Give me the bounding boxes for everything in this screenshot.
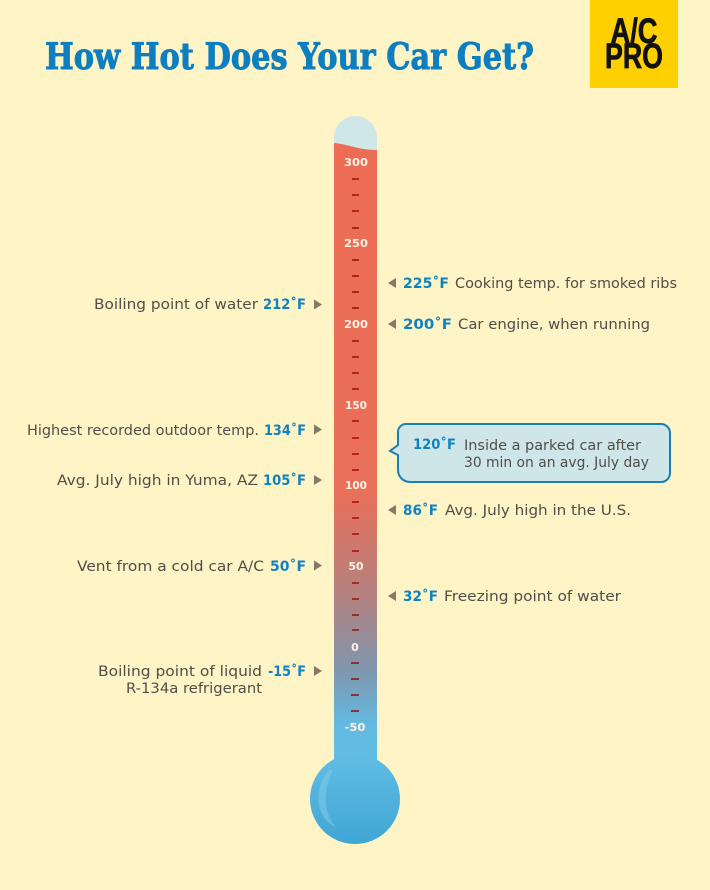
label: 225F smoked ribs: 225˚F (403, 275, 449, 292)
thermometer glass top (334, 116, 377, 152)
scale labels: 150 (345, 399, 367, 412)
callout: 120F parked car (390, 424, 670, 482)
label: 105F Yuma: 105˚F (263, 472, 306, 489)
label: 200F engine (388, 316, 650, 333)
scale labels: 50 (348, 560, 364, 573)
thermometer bulb (310, 754, 400, 844)
label: -15F refrigerant: Boiling point of liquid (98, 664, 262, 680)
scale labels: 100 (345, 479, 367, 492)
label: -15F refrigerant: -15˚F (268, 663, 306, 680)
label: 32F freezing: 32˚F (403, 588, 438, 605)
label: 32F freezing: Freezing point of water (444, 589, 621, 605)
label: 50F vent (77, 558, 322, 575)
label: 86F US high: 86˚F (403, 502, 438, 519)
label: 105F Yuma: Avg. July high in Yuma, AZ (57, 473, 258, 489)
label: 200F engine: Car engine, when running (458, 317, 650, 333)
scale labels: 0 (351, 641, 359, 654)
label: 32F freezing (388, 588, 621, 605)
logo: A/C Pro: A/C (610, 12, 658, 51)
scale ticks (351, 178, 359, 712)
label: 86F US high (388, 502, 631, 519)
label: -15F refrigerant: R-134a refrigerant (126, 681, 262, 697)
bulb highlight (318, 770, 336, 827)
label: 212F boiling point of water (94, 296, 322, 313)
thermometer tube (334, 143, 377, 770)
thermometer (310, 116, 400, 844)
callout: 120F parked car: Inside a parked car after (464, 438, 641, 454)
label: 105F Yuma (57, 472, 322, 489)
logo: A/C Pro: PRO (605, 37, 663, 76)
title: How Hot Does Your Car Get? (45, 36, 534, 78)
label: 212F boiling point of water: 212˚F (263, 296, 306, 313)
label: 134F highest recorded: Highest recorded outdoor temp. (27, 423, 259, 439)
label: 50F vent: 50˚F (270, 558, 306, 575)
callout: 120F parked car: 30 min on an avg. July day (464, 455, 649, 471)
label: -15F refrigerant (98, 663, 322, 697)
scale labels: 200 (344, 318, 368, 331)
label: 212F boiling point of water: Boiling point of water (94, 297, 258, 313)
logo: A/C Pro (590, 0, 678, 88)
label: 50F vent: Vent from a cold car A/C (77, 559, 264, 575)
callout: 120F parked car: 120˚F (413, 436, 456, 453)
scale labels: 250 (344, 237, 368, 250)
label: 200F engine: 200˚F (403, 316, 452, 333)
scale labels: -50 (344, 721, 366, 734)
label: 86F US high: Avg. July high in the U.S. (445, 503, 631, 519)
label: 225F smoked ribs: Cooking temp. for smoked ribs (455, 276, 677, 292)
scale labels: 300 (344, 156, 368, 169)
scale labels (344, 156, 368, 734)
label: 134F highest recorded: 134˚F (264, 422, 306, 439)
